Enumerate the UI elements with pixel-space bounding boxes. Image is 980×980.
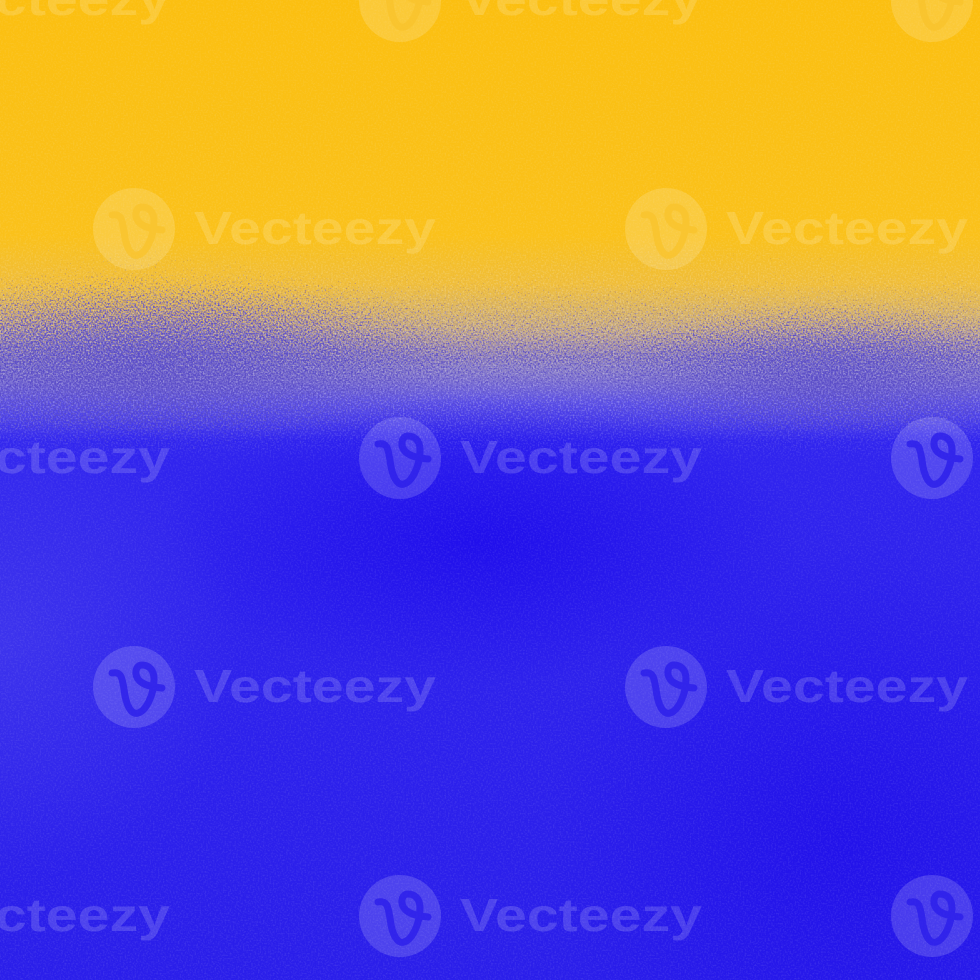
watermark row 1 — [0, 0, 973, 42]
darker blue lower right glow — [0, 540, 980, 980]
spray across the transition band — [0, 250, 980, 450]
watermark logo top centre — [359, 0, 441, 42]
watermark row 3 — [0, 417, 973, 499]
watermark text right lower: Vecteezy — [726, 660, 969, 712]
watermark logo right lower — [625, 646, 707, 728]
watermark text bottom centre: Vecteezy — [460, 889, 703, 941]
watermark logo left lower — [93, 646, 175, 728]
watermark logo right — [625, 188, 707, 270]
watermark row 4 — [93, 646, 969, 728]
watermark logo bottom centre — [359, 875, 441, 957]
watermark row 2 — [93, 188, 969, 270]
watermark text left lower: Vecteezy — [194, 660, 437, 712]
watermark logo top right — [891, 0, 973, 42]
watermark logo bottom right — [891, 875, 973, 957]
darker blue centre glow — [0, 390, 980, 690]
watermark text right: Vecteezy — [726, 202, 969, 254]
watermark text centre: Vecteezy — [460, 431, 703, 483]
paler blue left glow — [0, 400, 240, 880]
watermark logo centre — [359, 417, 441, 499]
watermark logo far right — [891, 417, 973, 499]
watermark text left: Vecteezy — [194, 202, 437, 254]
watermark row 5 — [0, 875, 973, 957]
watermark logo left — [93, 188, 175, 270]
